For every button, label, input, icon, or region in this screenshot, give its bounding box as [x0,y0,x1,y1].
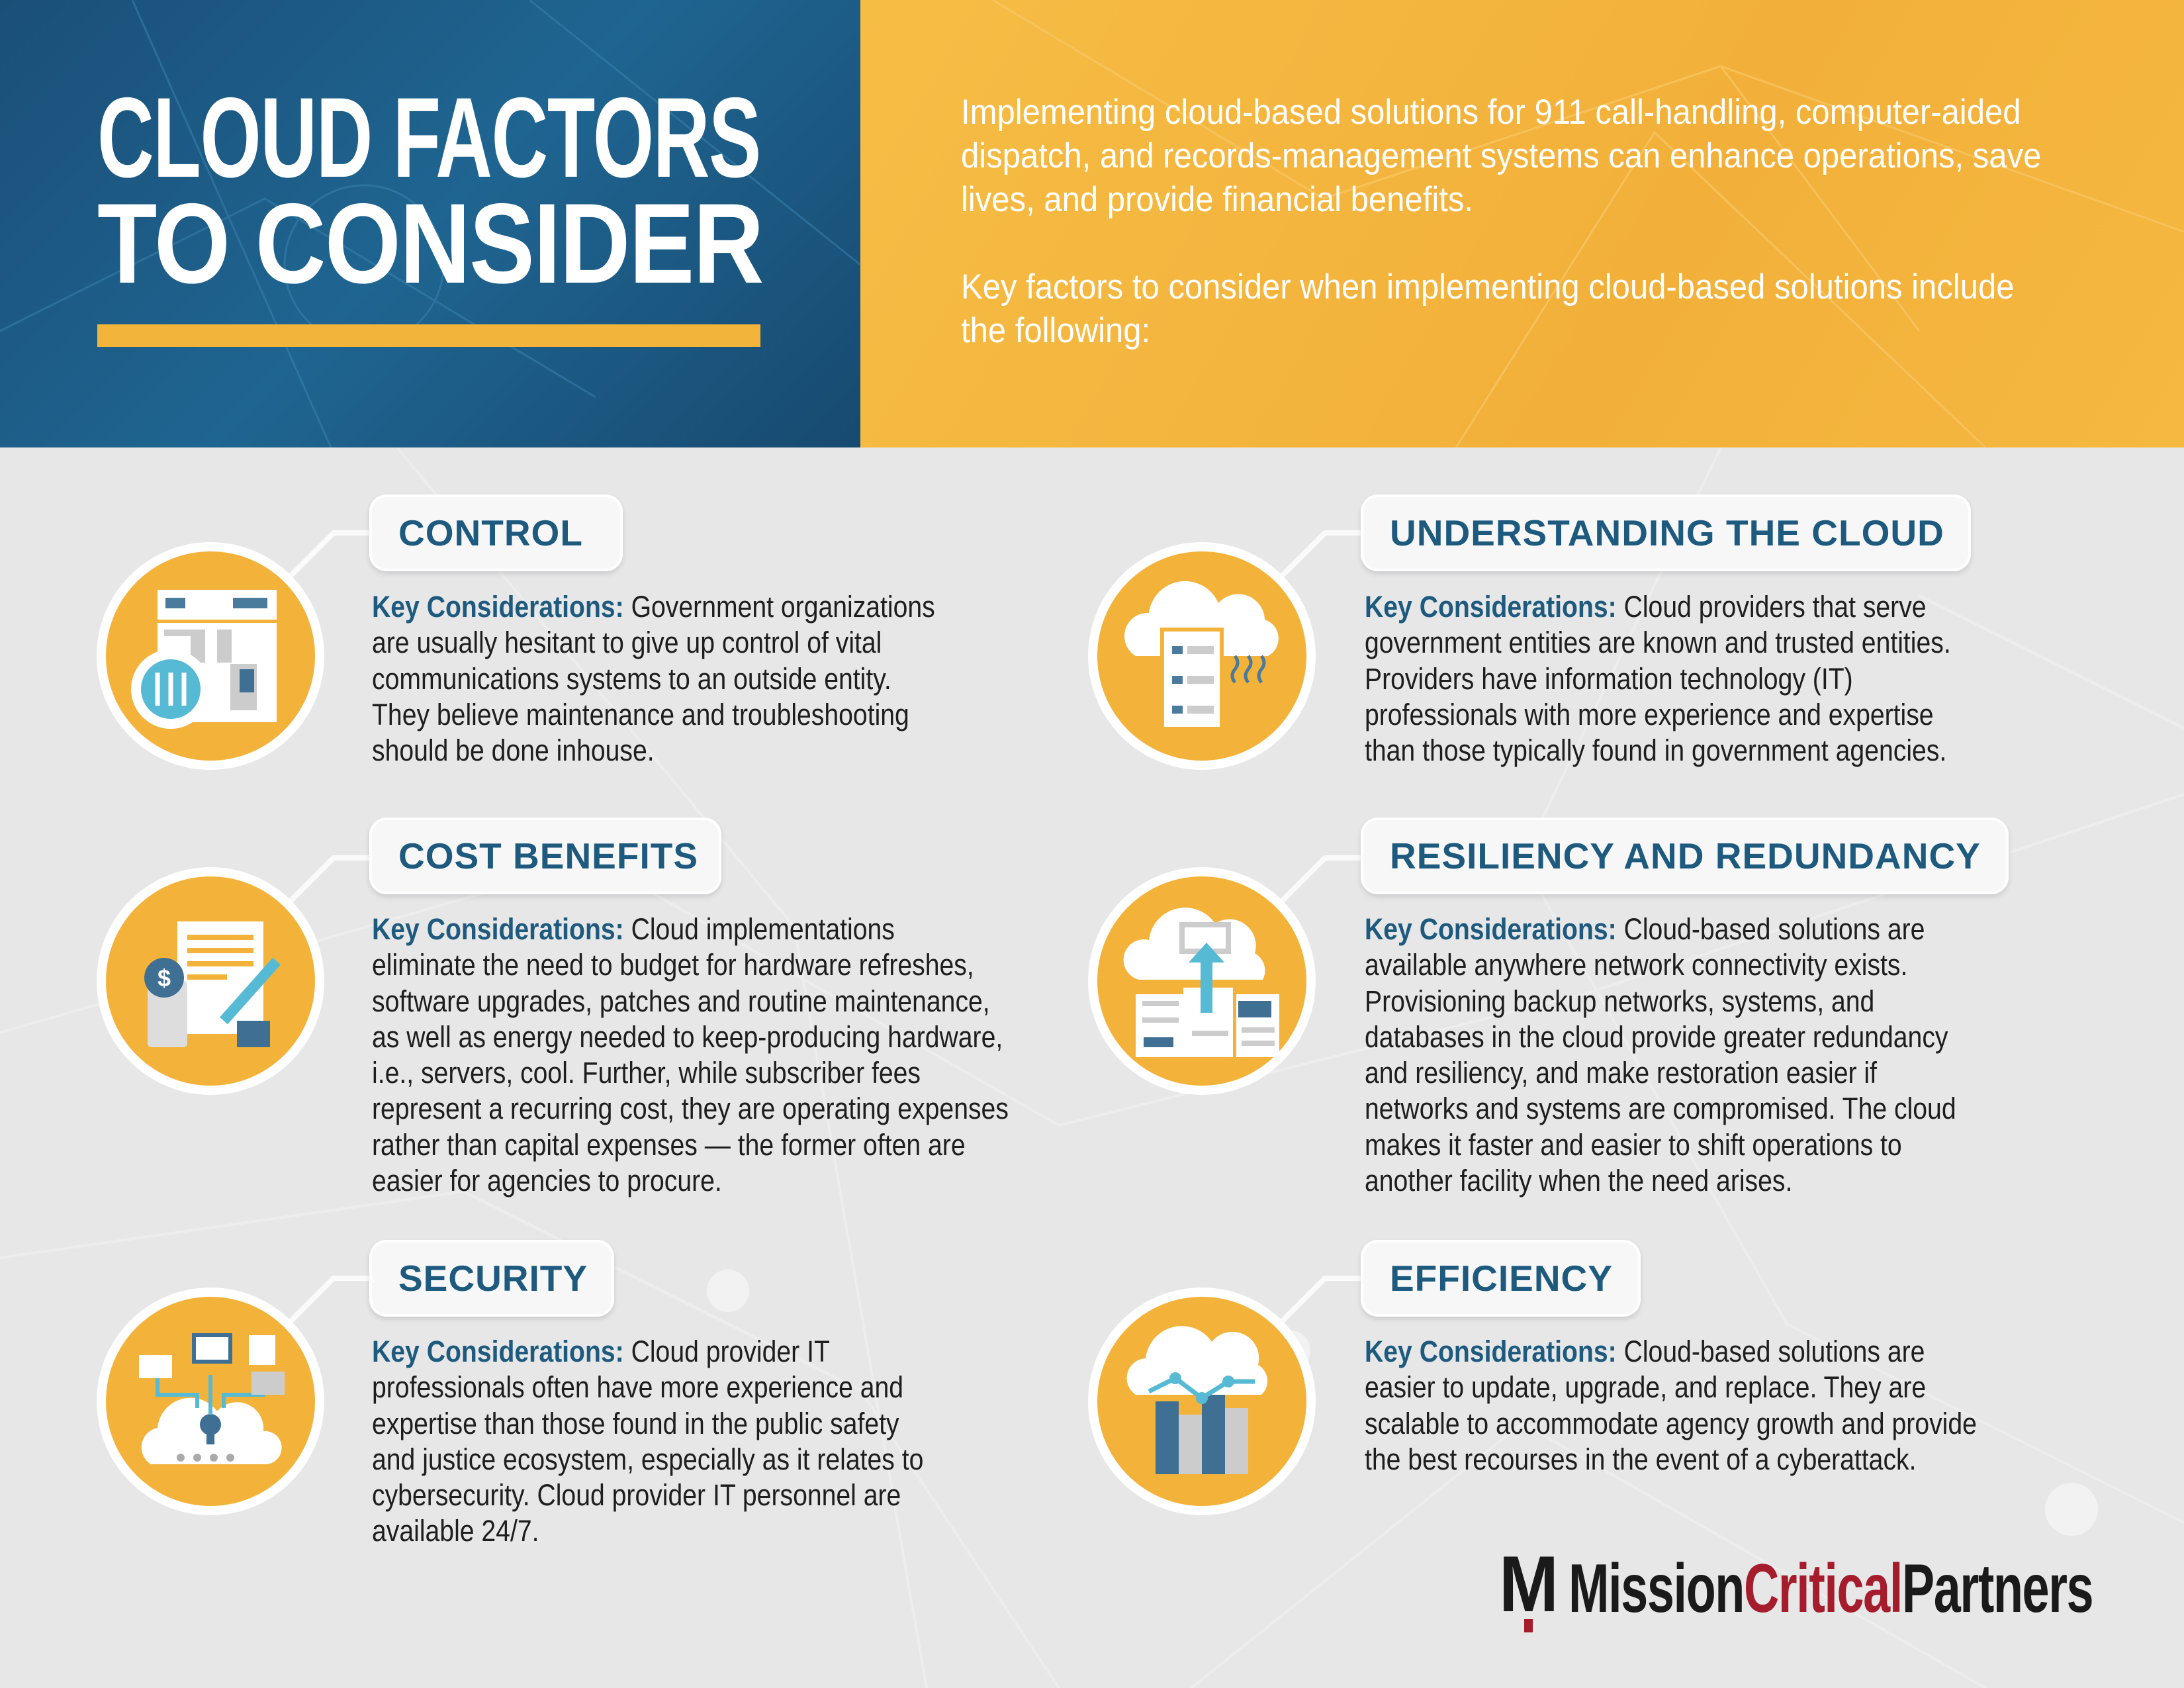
text: security: cybersecurity. Cloud provider IT personnel are [372,1478,901,1512]
text: security: expertise than those found in the public safety [372,1407,899,1440]
text: efficiency: Key Considerations: Cloud-based solutions are [1365,1335,1925,1368]
heading: understanding the cloud [1361,494,1971,571]
text: understanding the cloud [1365,590,1951,767]
intro text [961,93,2041,350]
text: resiliency and redundancy: Key Considerations: Cloud-based solutions are [1365,912,1925,946]
text: understanding the cloud: Providers have information technology (IT) [1365,662,1853,696]
icon: cloud upload documents [1124,908,1279,1057]
text: control: They believe maintenance and troubleshooting [372,698,909,731]
text: security: professionals often have more experience and [372,1370,903,1404]
icon: cost document: $ [158,964,171,992]
icon: efficiency chart [1126,1326,1268,1474]
text: resiliency and redundancy: databases in the cloud provide greater redundancy [1365,1020,1948,1054]
text: efficiency [1365,1335,1977,1476]
heading: cost benefits [369,818,721,894]
title: CLOUD FACTORS [97,74,760,201]
text: control: communications systems to an outside entity. [372,662,891,696]
title underline bar [97,324,760,347]
text: cost benefits: represent a recurring cost, they are operating expenses [372,1092,1009,1125]
text: security [372,1335,923,1548]
icon: cloud server [1124,581,1279,727]
text: security: Key Considerations: Cloud provider IT [372,1335,830,1368]
text: cost benefits: easier for agencies to procure. [372,1164,722,1197]
heading: resiliency and redundancy: RESILIENCY AND REDUNDANCY [1390,835,1981,876]
intro text: Key factors to consider when implementing cloud-based solutions include [961,267,2014,306]
text: understanding the cloud: government entities are known and trusted entities. [1365,626,1951,659]
logo: Mission Critical Partners [1499,1540,2093,1632]
header: blue title panel [0,0,860,447]
text: understanding the cloud: professionals with more experience and expertise [1365,698,1934,731]
intro text: Implementing cloud-based solutions for 911 call-handling, computer-aided [961,93,2021,132]
logo mark: M [1499,1540,1559,1628]
intro text: the following: [961,311,1150,350]
heading: efficiency [1361,1240,1641,1317]
text: resiliency and redundancy: Provisioning backup networks, systems, and [1365,984,1874,1018]
heading: resiliency and redundancy [1361,818,2009,894]
intro text: dispatch, and records-management systems can enhance operations, save [961,136,2041,175]
icon: security network [139,1333,285,1464]
text: security: and justice ecosystem, especially as it relates to [372,1442,923,1476]
text: cost benefits [372,912,1009,1197]
text: cost benefits: i.e., servers, cool. Further, while subscriber fees [372,1056,921,1090]
text: control: should be done inhouse. [372,733,655,767]
text: resiliency and redundancy: another facility when the need arises. [1365,1164,1792,1197]
text: control [372,590,935,767]
text: resiliency and redundancy: available anywhere network connectivity exists. [1365,948,1907,982]
text: understanding the cloud: Key Considerations: Cloud providers that serve [1365,590,1927,624]
text: resiliency and redundancy: and resiliency, and make restoration easier if [1365,1056,1877,1090]
title [97,74,763,307]
heading: security: SECURITY [398,1258,588,1299]
heading: efficiency: EFFICIENCY [1390,1258,1613,1299]
heading: control [369,494,623,571]
text: efficiency: easier to update, upgrade, and replace. They are [1365,1370,1926,1404]
heading: security [369,1240,614,1317]
heading: understanding the cloud: UNDERSTANDING THE CLOUD [1390,512,1944,553]
text: efficiency: scalable to accommodate agency growth and provide [1365,1407,1977,1440]
text: cost benefits: as well as energy needed to keep-producing hardware, [372,1020,1003,1054]
text: control: are usually hesitant to give up control of vital [372,626,882,659]
header: orange intro panel [860,0,2184,447]
text: cost benefits: software upgrades, patches and routine maintenance, [372,984,990,1018]
text: cost benefits: rather than capital expenses — the former often are [372,1128,966,1162]
heading: cost benefits: COST BENEFITS [398,835,698,876]
icon: control panel with gear [131,590,277,729]
intro text: lives, and provide financial benefits. [961,180,1473,219]
text: resiliency and redundancy: networks and systems are compromised. The cloud [1365,1092,1956,1125]
text: resiliency and redundancy: makes it faster and easier to shift operations to [1365,1128,1902,1162]
text: control: Key Considerations: Government organizations [372,590,935,624]
text: understanding the cloud: than those typically found in government agencies. [1365,733,1946,767]
text: efficiency: the best recourses in the event of a cyberattack. [1365,1442,1916,1476]
text: resiliency and redundancy [1365,912,1956,1197]
icon: cost document [144,921,281,1047]
heading: control: CONTROL [398,512,583,553]
logo wordmark: MissionCriticalPartners [1569,1550,2093,1627]
title: TO CONSIDER [97,180,763,307]
text: cost benefits: eliminate the need to budget for hardware refreshes, [372,948,974,982]
text: cost benefits: Key Considerations: Cloud implementations [372,912,895,946]
text: security: available 24/7. [372,1514,539,1548]
